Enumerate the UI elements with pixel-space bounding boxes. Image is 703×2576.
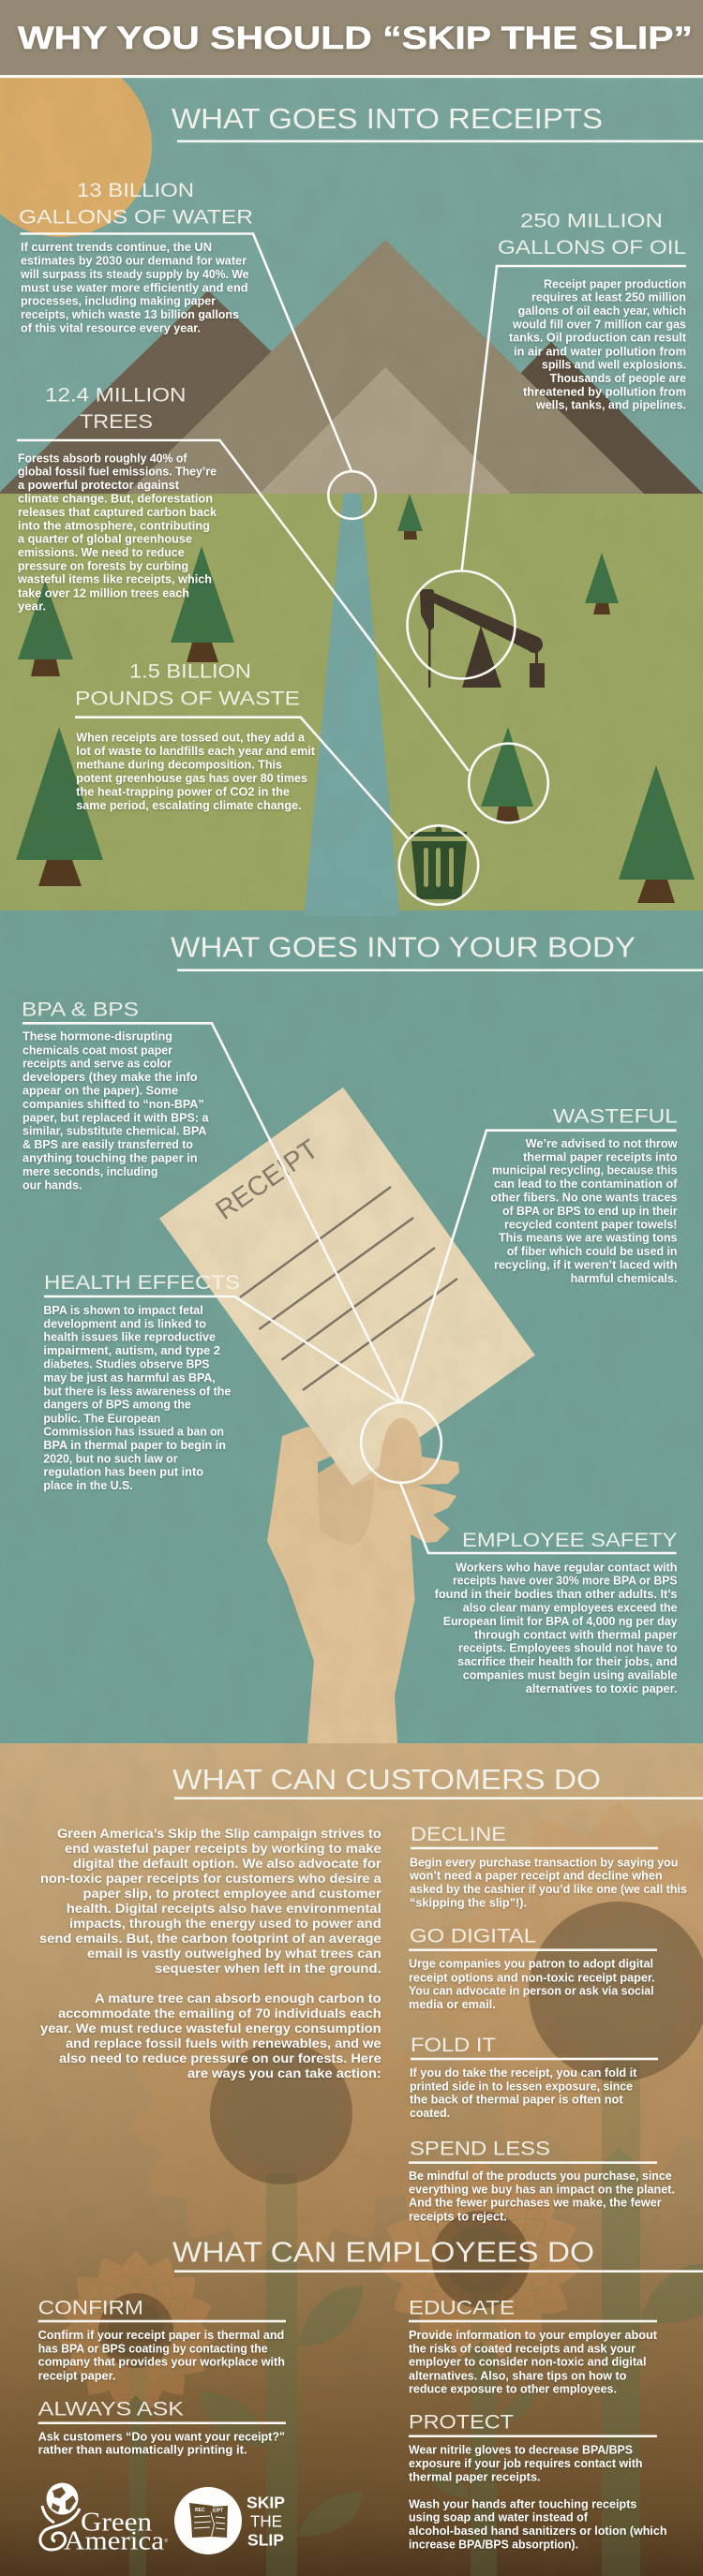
palm shadow — [318, 1464, 374, 1546]
mountain: main peak — [127, 240, 644, 494]
tree 2 — [585, 553, 619, 614]
text block: always ask — [38, 2398, 286, 2457]
text block: educate: employer to consider non-toxic and digital — [409, 2356, 647, 2369]
text block: 12.4 million trees: releases that captured carbon back — [18, 506, 217, 519]
text block: 12.4 million trees: take over 12 million trees each — [18, 586, 189, 600]
text block: BPA and BPS: appear on the paper). Some — [22, 1085, 178, 1098]
text block: employee safety: alternatives to toxic paper. — [526, 1682, 677, 1695]
text block: campaign introduction: A mature tree can absorb enough carbon to — [95, 1991, 381, 2006]
text block: health effects: but there is less awareness of the — [43, 1384, 231, 1398]
text block: educate: alternatives. Also, share tips on how to — [409, 2369, 627, 2382]
text block: educate: reduce exposure to other employees. — [409, 2383, 617, 2396]
text block: 13 billion gallons of water — [19, 179, 253, 334]
text block: 12.4 million trees: pressure on forests by curbing — [18, 559, 188, 572]
text block: wasteful: We’re advised to not throw — [526, 1137, 678, 1150]
panel: what goes into receipts landscape — [0, 55, 703, 910]
text block: wasteful: harmful chemicals. — [571, 1272, 677, 1285]
logo: Skip the Slip: SKIP — [247, 2494, 285, 2512]
text block: campaign introduction: accommodate the emailing of 70 individuals each — [58, 2006, 381, 2021]
text block: protect: alcohol-based hand sanitizers or lotion (which — [409, 2524, 667, 2538]
text block: campaign introduction: sequester when left in the ground. — [155, 1962, 381, 1976]
text block: health effects: public. The European — [43, 1412, 160, 1425]
icon: torn receipt: EIPT — [213, 2509, 223, 2514]
text block: 13 billion gallons of water: must use water more efficiently and end — [21, 281, 247, 294]
section heading: what can customers do: WHAT CAN CUSTOMERS DO — [172, 1764, 601, 1796]
icon: trash can — [411, 826, 467, 899]
text block: campaign introduction: also need to reduce pressure on our forests. Here — [59, 2051, 381, 2065]
text block: 250 million gallons of oil — [498, 210, 687, 412]
text block: fold it: printed side in to lessen exposure, since — [410, 2080, 633, 2093]
text block: health effects: development and is linked to — [43, 1317, 206, 1330]
text block: BPA and BPS: our hands. — [22, 1178, 82, 1192]
icon: globe — [47, 2482, 79, 2514]
text block: 12.4 million trees: a powerful protector against — [18, 479, 180, 492]
text block: 1.5 billion pounds of waste: methane during decomposition. This — [76, 758, 282, 771]
text block: BPA and BPS: anything touching the paper in — [22, 1152, 197, 1165]
text block: decline: Begin every purchase transaction by saying you — [410, 1856, 678, 1869]
tree 1 — [397, 494, 423, 540]
text block: protect: Wash your hands after touching receipts — [409, 2497, 636, 2510]
text block: 1.5 billion pounds of waste: When receipts are tossed out, they add a — [76, 732, 306, 745]
text block: campaign introduction: send emails. But, the carbon footprint of an average — [39, 1932, 381, 1946]
receipt lines — [240, 1187, 457, 1390]
text block: BPA and BPS: paper, but replaced it with BPS: a — [22, 1111, 209, 1124]
plant leaves — [200, 2264, 703, 2537]
text block: 1.5 billion pounds of waste: 1.5 BILLION — [129, 659, 251, 682]
plant stems — [129, 2061, 640, 2576]
text block: protect: increase BPA/BPS absorption). — [409, 2538, 578, 2551]
text block: fold it: coated. — [410, 2107, 450, 2120]
text block: 1.5 billion pounds of waste: the heat-trapping power of CO2 in the — [76, 785, 290, 798]
thumb — [378, 1418, 422, 1489]
text block: 12.4 million trees: 12.4 MILLION — [45, 383, 186, 406]
text block: spend less: Be mindful of the products you purchase, since — [409, 2169, 672, 2183]
text block: wasteful: recycling, if it weren’t laced with — [494, 1258, 677, 1271]
text block: employee safety: sacrifice their health for their jobs, and — [457, 1655, 677, 1668]
text block: 13 billion gallons of water: GALLONS OF WATER — [19, 206, 253, 229]
panel: what can people do background — [0, 1743, 703, 2576]
logo: Skip the Slip — [174, 2487, 285, 2554]
text block: wasteful: This means we are wasting tons — [499, 1232, 677, 1245]
icon: sun — [0, 55, 152, 237]
text block: 250 million gallons of oil: spills and well explosions. — [542, 359, 686, 372]
flower top right — [423, 1798, 703, 2187]
text block: health effects: Commission has issued a ban on — [43, 1426, 224, 1439]
text block: protect: Wear nitrile gloves to decrease BPA/BPS — [409, 2444, 633, 2457]
text block: 250 million gallons of oil: requires at least 250 million — [531, 291, 686, 304]
text block: go digital: You can advocate in person or ask via social — [409, 1985, 654, 1998]
text block: 12.4 million trees: year. — [18, 600, 46, 614]
callout ring and connectors: body — [22, 1023, 677, 1553]
tree 4 — [171, 546, 234, 662]
text block: employee safety: also clear many employees exceed the — [463, 1601, 677, 1614]
mountain: left dark peak — [0, 290, 418, 494]
text block: fold it: If you do take the receipt, you can fold it — [410, 2066, 637, 2080]
text block: wasteful: of BPA or BPS to end up in their — [502, 1205, 678, 1218]
text block: 12.4 million trees: global fossil fuel emissions. They’re — [18, 466, 217, 479]
text block: 1.5 billion pounds of waste: POUNDS OF WASTE — [75, 687, 300, 709]
text block: go digital: media or email. — [409, 1998, 496, 2011]
text block: BPA and BPS: These hormone-disrupting — [22, 1030, 172, 1044]
logo: Green America: Green — [81, 2508, 153, 2538]
receipt label: RECEIPT — [211, 1134, 324, 1226]
section heading: what goes into your body: WHAT GOES INTO YOUR BODY — [171, 932, 636, 964]
text block: campaign introduction: and replace fossil fuels with renewables, and we — [66, 2036, 381, 2050]
hand — [267, 1427, 459, 1743]
text block: 250 million gallons of oil: in air and water pollution from — [514, 345, 686, 358]
text block: health effects — [43, 1271, 240, 1492]
flower lower left — [53, 2249, 218, 2413]
logo: Green America — [40, 2482, 168, 2556]
text block: fold it: the back of thermal paper is often not — [410, 2094, 623, 2107]
text block: wasteful: thermal paper receipts into — [523, 1150, 678, 1163]
logo: Green America: America — [64, 2526, 164, 2556]
text block: always ask: rather than automatically printing it. — [38, 2444, 247, 2457]
text block: go digital: receipt options and non-toxic receipt paper. — [409, 1971, 655, 1984]
text block: campaign introduction: email is vastly outweighed by what trees can — [87, 1947, 381, 1961]
text block: 12.4 million trees: a quarter of global greenhouse — [18, 533, 192, 546]
text block: campaign introduction: non-toxic paper receipts for customers who desire a — [40, 1872, 381, 1886]
icon: torn receipt — [189, 2503, 228, 2538]
text block: 1.5 billion pounds of waste: same period, escalating climate change. — [76, 799, 302, 812]
text block: health effects: health issues like reproductive — [43, 1331, 216, 1344]
text block: campaign introduction: impacts, through the energy used to power and — [69, 1917, 381, 1931]
text block: 12.4 million trees: TREES — [80, 410, 153, 433]
text block: health effects: HEALTH EFFECTS — [44, 1271, 240, 1294]
text block: health effects: 2020, but no such law or — [43, 1452, 178, 1465]
text block: decline — [409, 1823, 687, 1909]
text block: go digital: GO DIGITAL — [410, 1924, 536, 1947]
text block: campaign introduction: paper slip, to protect employee and customer — [82, 1887, 381, 1901]
section heading: what goes into receipts: WHAT GOES INTO RECEIPTS — [172, 103, 603, 135]
text block: BPA and BPS: chemicals coat most paper — [22, 1044, 172, 1057]
text block: employee safety: through contact with thermal paper — [474, 1628, 678, 1641]
mountain: right dark peak — [403, 342, 703, 494]
text block: spend less: everything we buy has an impact on the planet. — [409, 2183, 675, 2196]
tree 5 — [16, 727, 103, 886]
icon: swirl figure — [40, 2506, 80, 2550]
text block: 250 million gallons of oil: tanks. Oil production can result — [509, 332, 687, 345]
field — [0, 494, 703, 910]
text block: wasteful: can lead to the contamination of — [494, 1177, 678, 1191]
text block: always ask: Ask customers “Do you want your receipt?" — [38, 2430, 285, 2443]
text block: BPA and BPS: & BPS are easily transferred to — [22, 1138, 193, 1151]
text block: employee safety: Workers who have regular contact with — [456, 1561, 677, 1574]
header band — [0, 0, 703, 78]
section heading: what can employees do: WHAT CAN EMPLOYEES DO — [172, 2236, 594, 2268]
text block: confirm: Confirm if your receipt paper is thermal and — [38, 2329, 284, 2342]
text block: 250 million gallons of oil: wells, tanks, and pipelines. — [535, 399, 686, 412]
text block: BPA and BPS: companies shifted to “non-BPA” — [22, 1098, 204, 1111]
text block: campaign introduction: health. Digital receipts also have environmental — [67, 1902, 381, 1916]
flower lower right — [378, 2157, 584, 2362]
text block: fold it: FOLD IT — [411, 2034, 496, 2056]
text block: 250 million gallons of oil: Receipt paper production — [544, 277, 686, 290]
text block: wasteful: WASTEFUL — [553, 1104, 678, 1127]
text block: protect: PROTECT — [409, 2411, 514, 2434]
text block: 12.4 million trees: emissions. We need to reduce — [18, 546, 185, 559]
text block: 13 billion gallons of water: will surpass its steady supply by 40%. We — [20, 268, 248, 281]
text block: 1.5 billion pounds of waste: potent greenhouse gas has over 80 times — [76, 772, 307, 785]
text block: 13 billion gallons of water: of this vital resource every year. — [21, 321, 201, 334]
text block: 12.4 million trees: into the atmosphere, contributing — [18, 519, 210, 532]
text block: 250 million gallons of oil: 250 MILLION — [520, 210, 663, 232]
text block: educate: Provide information to your employer about — [409, 2329, 658, 2342]
text block: protect: exposure if your job requires contact with — [409, 2457, 643, 2470]
logo: Green America: ® — [165, 2538, 169, 2544]
text block: decline: “skipping the slip”!). — [410, 1896, 527, 1909]
text block: health effects: may be just as harmful as BPA, — [43, 1371, 216, 1384]
text block: fold it — [410, 2034, 658, 2120]
text block: campaign introduction — [39, 1827, 381, 2080]
text block: 13 billion gallons of water: processes, including making paper — [21, 295, 216, 308]
text block: health effects: BPA is shown to impact fetal — [43, 1304, 203, 1317]
text block: always ask: ALWAYS ASK — [38, 2398, 185, 2421]
text block: health effects: diabetes. Studies observe BPS — [43, 1357, 209, 1370]
text block: decline: asked by the cashier if you’d like one (we call this — [410, 1883, 687, 1896]
text block: 1.5 billion pounds of waste — [75, 659, 316, 812]
river — [305, 494, 399, 910]
text block: BPA and BPS: receipts and serve as color — [22, 1058, 172, 1071]
text block: campaign introduction: end wasteful paper receipts by working to make — [65, 1842, 381, 1856]
text block: employee safety: receipts. Employees should not have to — [458, 1642, 678, 1655]
receipt — [159, 1088, 535, 1486]
text block: 13 billion gallons of water: If current trends continue, the UN — [21, 241, 212, 254]
text block: 12.4 million trees — [17, 383, 217, 614]
text block: 13 billion gallons of water: estimates by 2030 our demand for water — [21, 254, 247, 267]
text block: protect: using soap and water instead of — [409, 2511, 589, 2524]
text block: confirm — [38, 2296, 286, 2382]
callout rings and connectors: receipts — [17, 234, 686, 905]
text block: campaign introduction: year. We must reduce wasteful energy consumption — [40, 2021, 381, 2036]
text block: 250 million gallons of oil: would fill over 7 million car gas — [512, 318, 686, 331]
text block: educate: the risks of coated receipts and ask your — [409, 2342, 636, 2355]
text block: wasteful: recycled content paper towels! — [504, 1218, 677, 1231]
text block: campaign introduction: digital the default option. We also advocate for — [73, 1857, 381, 1871]
title: WHY YOU SHOULD “SKIP THE SLIP” — [18, 21, 693, 56]
text block: spend less: receipts to reject. — [409, 2210, 507, 2223]
text block: protect — [409, 2411, 667, 2551]
text block: BPA and BPS: BPA & BPS — [22, 998, 139, 1020]
text block: confirm: CONFIRM — [38, 2296, 143, 2318]
tree 3 — [18, 581, 73, 676]
text block: health effects: place in the U.S. — [43, 1479, 133, 1492]
mountain: front peak — [260, 367, 511, 494]
text block: wasteful: municipal recycling, because this — [492, 1164, 677, 1177]
text block: 13 billion gallons of water: 13 BILLION — [77, 179, 194, 201]
text block: 12.4 million trees: Forests absorb roughly 40% of — [18, 452, 187, 465]
text block: health effects: dangers of BPS among the — [43, 1399, 191, 1412]
text block: 250 million gallons of oil: GALLONS OF OIL — [498, 236, 686, 259]
text block: spend less: SPEND LESS — [410, 2138, 550, 2160]
logo: Skip the Slip: SLIP — [247, 2531, 284, 2550]
text block: 250 million gallons of oil: threatened by pollution from — [523, 385, 686, 398]
text block: wasteful: other fibers. No one wants traces — [490, 1191, 677, 1204]
text block: go digital: Urge companies you patron to adopt digital — [409, 1958, 653, 1971]
text block: health effects: BPA in thermal paper to begin in — [43, 1439, 226, 1452]
hand notch — [318, 1455, 335, 1473]
icon: oil pump — [420, 589, 545, 688]
text block: campaign introduction: are ways you can take action: — [187, 2066, 381, 2080]
text block: confirm: receipt paper. — [38, 2369, 115, 2382]
logo: Skip the Slip: THE — [250, 2512, 282, 2531]
text block: 250 million gallons of oil: gallons of oil each year, which — [518, 304, 686, 318]
text block: spend less — [409, 2138, 675, 2223]
tree 7 — [619, 765, 695, 903]
panel: what goes into your body — [0, 910, 703, 1743]
text block: protect: thermal paper receipts. — [409, 2470, 541, 2483]
text block: decline: won’t need a paper receipt and decline when — [409, 1870, 663, 1883]
icon: torn receipt: REC — [195, 2508, 205, 2513]
text block: spend less: And the fewer purchases we make, the fewer — [409, 2197, 662, 2210]
text block: 12.4 million trees: wasteful items like receipts, which — [17, 573, 212, 586]
text block: educate: EDUCATE — [409, 2296, 515, 2318]
text block: go digital — [409, 1924, 657, 2011]
text block: 12.4 million trees: climate change. But, deforestation — [18, 493, 213, 506]
flower centre — [122, 1956, 441, 2273]
text block: educate — [409, 2296, 658, 2396]
text block: employee safety — [435, 1529, 678, 1695]
text block: BPA and BPS: mere seconds, including — [22, 1165, 157, 1178]
text block: BPA and BPS: similar, substitute chemical. BPA — [22, 1125, 206, 1138]
text block: health effects: regulation has been put into — [43, 1466, 203, 1479]
text block: decline: DECLINE — [411, 1823, 506, 1845]
tree 6 circled — [481, 727, 533, 822]
text block: employee safety: found in their bodies than other adults. It’s — [435, 1588, 677, 1601]
text block: employee safety: EMPLOYEE SAFETY — [462, 1529, 677, 1551]
text block: BPA and BPS: developers (they make the info — [22, 1071, 198, 1084]
text block: confirm: has BPA or BPS coating by contacting the — [38, 2342, 268, 2355]
text block: employee safety: companies must begin using available — [463, 1669, 677, 1682]
text block: BPA and BPS — [22, 998, 209, 1192]
text block: employee safety: European limit for BPA of 4,000 ng per day — [443, 1615, 677, 1628]
text block: confirm: company that provides your workplace with — [38, 2356, 285, 2369]
text block: 250 million gallons of oil: Thousands of people are — [550, 372, 686, 385]
text block: health effects: impairment, autism, and type 2 — [43, 1344, 220, 1357]
text block: 13 billion gallons of water: receipts, which waste 13 billion gallons — [21, 308, 239, 321]
text block: employee safety: receipts have over 30% more BPA or BPS — [453, 1575, 677, 1588]
text block: 1.5 billion pounds of waste: lot of waste to landfills each year and emit — [76, 745, 316, 758]
text block: campaign introduction: Green America’s Skip the Slip campaign strives to — [57, 1827, 381, 1841]
text block: wasteful: of fiber which could be used in — [507, 1245, 677, 1258]
text block: wasteful — [490, 1104, 678, 1285]
